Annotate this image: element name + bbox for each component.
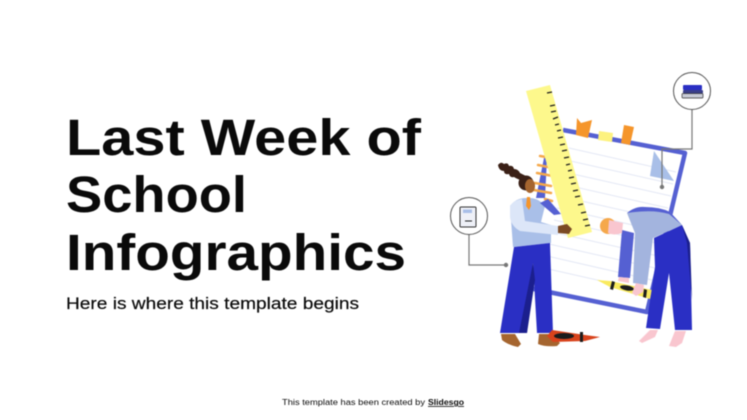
footer credit: This template has been created by: [282, 398, 425, 407]
icon: notebook: [450, 198, 488, 234]
trousers: [646, 225, 692, 330]
feet: [639, 330, 658, 343]
illustration: right student: [597, 207, 692, 347]
shirt: [627, 207, 682, 285]
footer credit: Slidesgo: [428, 398, 464, 407]
triangle ruler: [650, 151, 674, 181]
connector: top right icon to notebook: [660, 110, 692, 189]
yellow crayon: [597, 280, 652, 299]
illustration: yellow ruler: [526, 85, 592, 238]
hair ponytail: [498, 163, 526, 181]
torso and arm: [510, 198, 551, 247]
trousers: [500, 243, 553, 333]
title: Infographics: [66, 224, 406, 281]
footer credit: [282, 398, 464, 407]
title: Last Week of: [66, 109, 422, 166]
shoes: [501, 334, 521, 347]
illustration: left student: [498, 163, 572, 347]
hand: [558, 224, 572, 234]
connector: left icon to student: [469, 235, 508, 267]
hand: [632, 283, 644, 296]
illustration: orange ladder behind the figure: [534, 156, 553, 201]
tabs: [576, 118, 592, 138]
tie: [526, 197, 531, 210]
illustration: notebook board: [529, 118, 685, 312]
icon: stack of books: [674, 72, 710, 110]
illustration: red crayon: [547, 330, 600, 342]
subtitle: Here is where this template begins: [66, 294, 359, 313]
title: [66, 109, 422, 281]
title: School: [66, 166, 247, 223]
hair and face: [600, 218, 616, 234]
far arm: [618, 230, 634, 278]
head: [518, 176, 534, 190]
